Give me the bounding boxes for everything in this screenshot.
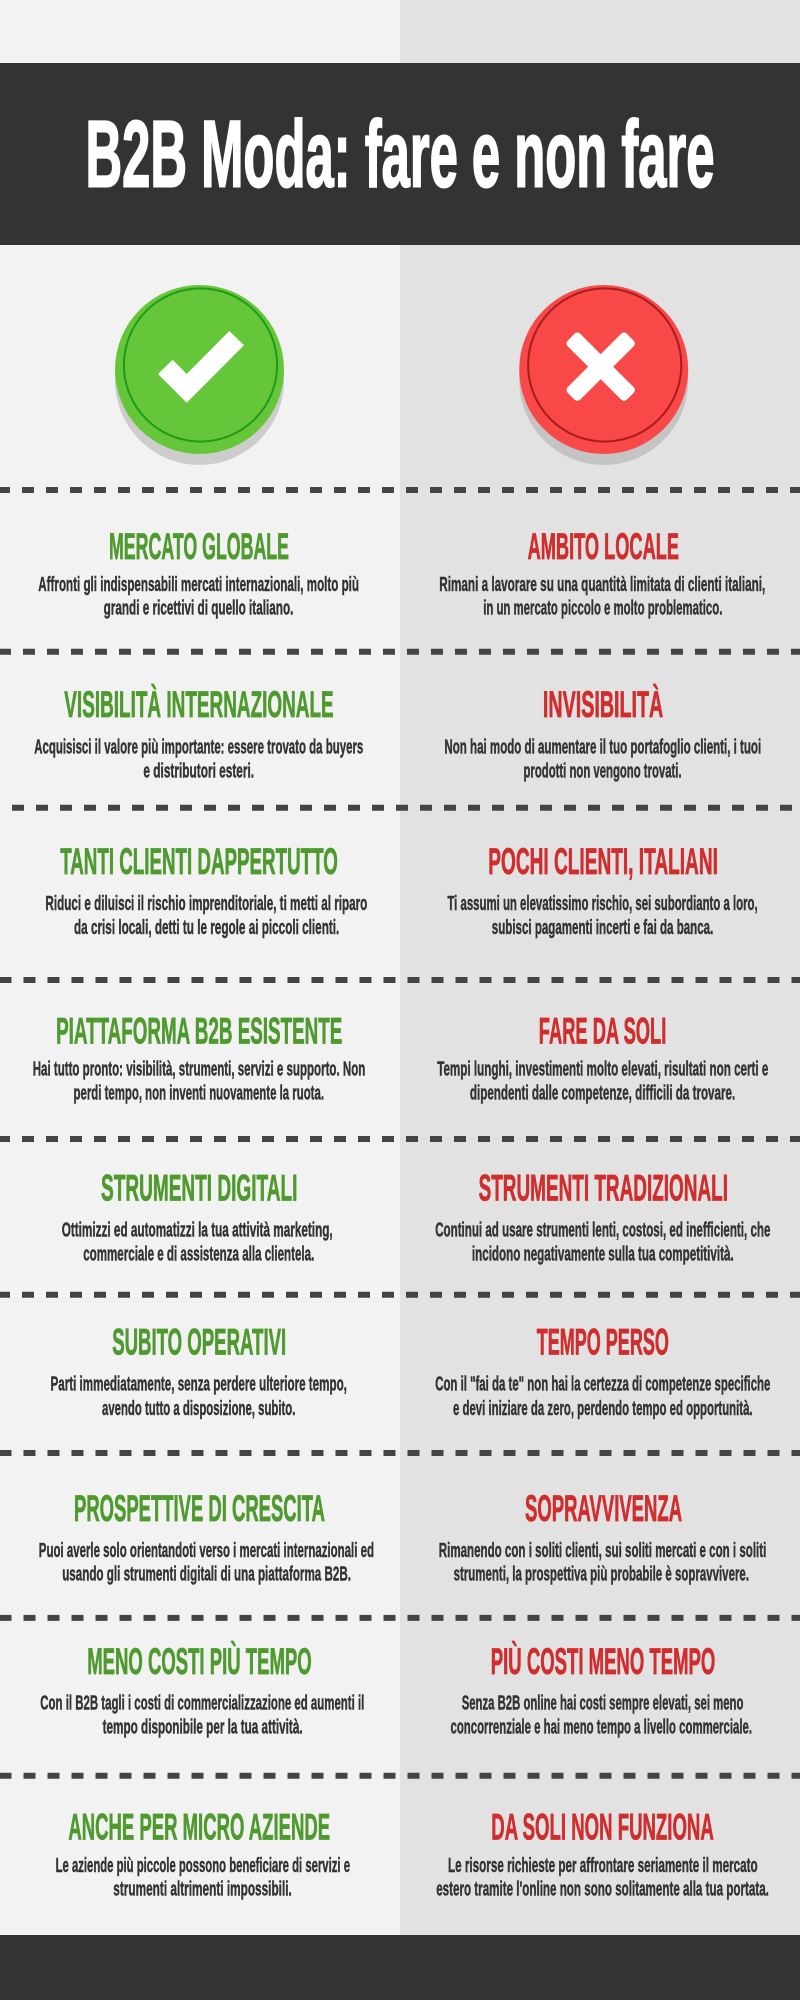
panel: tempo perso	[435, 1321, 770, 1420]
panel: fare da soli: FARE DA SOLI	[539, 1009, 666, 1051]
text block	[62, 1220, 333, 1266]
icon: red cross button	[519, 285, 688, 465]
text block	[38, 574, 359, 620]
text block: commerciale e di assistenza alla clientela.	[83, 1244, 314, 1266]
text block	[439, 574, 765, 620]
text block: perdi tempo, non inventi nuovamente la ruota.	[74, 1082, 324, 1104]
panel: pochi clienti, italiani	[447, 840, 758, 939]
text block	[447, 893, 758, 939]
panel: mercato globale: MERCATO GLOBALE	[109, 525, 289, 567]
text block: Affronti gli indispensabili mercati internazionali, molto più	[38, 574, 359, 596]
text block: Acquisisci il valore più importante: essere trovato da buyers	[34, 736, 363, 758]
text block	[34, 736, 363, 782]
panel: mercato globale	[38, 525, 359, 620]
heading: TANTI CLIENTI DAPPERTUTTO	[60, 840, 338, 882]
text block: da crisi locali, detti tu le regole ai piccoli clienti.	[74, 917, 339, 939]
text block: prodotti non vengono trovati.	[524, 760, 682, 782]
panel: meno costi più tempo: MENO COSTI PIÙ TEMPO	[87, 1640, 312, 1682]
text block	[435, 1374, 770, 1420]
text block: Puoi averle solo orientandoti verso i mercati internazionali ed	[39, 1540, 374, 1562]
text block: strumenti altrimenti impossibili.	[113, 1879, 292, 1901]
panel: sopravvivenza	[439, 1487, 766, 1586]
panel: più costi meno tempo	[450, 1640, 752, 1739]
panel: prospettive di crescita: PROSPETTIVE DI CRESCITA	[74, 1487, 325, 1529]
panel: fare da soli	[437, 1009, 768, 1104]
icon: green check button	[115, 285, 284, 465]
title banner	[0, 63, 800, 245]
text block	[56, 1855, 350, 1901]
heading: INVISIBILITÀ	[543, 683, 663, 725]
panel: tanti clienti dappertutto	[45, 840, 367, 939]
panel: meno costi più tempo	[40, 1640, 364, 1739]
text block: avendo tutto a disposizione, subito.	[102, 1398, 295, 1420]
text block	[33, 1058, 365, 1104]
text block: tempo disponibile per la tua attività.	[103, 1717, 303, 1739]
heading: STRUMENTI DIGITALI	[101, 1167, 297, 1209]
text block	[439, 1540, 766, 1586]
heading: PIATTAFORMA B2B ESISTENTE	[56, 1009, 342, 1051]
footer band	[0, 1935, 800, 2000]
text block	[436, 1855, 769, 1901]
text block: Ottimizzi ed automatizzi la tua attività marketing,	[62, 1220, 333, 1242]
text block: Hai tutto pronto: visibilità, strumenti, servizi e supporto. Non	[33, 1058, 365, 1080]
panel: prospettive di crescita	[39, 1487, 374, 1586]
text block	[40, 1693, 364, 1739]
panel: anche per micro aziende: ANCHE PER MICRO AZIENDE	[68, 1806, 330, 1848]
panel: subito operativi	[50, 1321, 347, 1420]
panel: piattaforma b2b esistente	[33, 1009, 365, 1104]
text block: grandi e ricettivi di quello italiano.	[104, 598, 293, 620]
text block	[444, 736, 761, 782]
text block: usando gli strumenti digitali di una piattaforma B2B.	[62, 1564, 351, 1586]
text block	[437, 1058, 768, 1104]
heading: VISIBILITÀ INTERNAZIONALE	[64, 683, 334, 725]
text block: Le aziende più piccole possono beneficiare di servizi e	[56, 1855, 350, 1877]
text block	[50, 1374, 347, 1420]
panel: ambito locale	[439, 525, 765, 620]
text block: Parti immediatamente, senza perdere ulteriore tempo,	[50, 1374, 347, 1396]
panel: anche per micro aziende	[56, 1806, 350, 1901]
panel: invisibilità	[444, 683, 761, 782]
panel: strumenti digitali	[62, 1167, 333, 1266]
text block	[39, 1540, 374, 1586]
text block	[45, 893, 367, 939]
text block: Riduci e diluisci il rischio imprenditoriale, ti metti al riparo	[45, 893, 367, 915]
text block	[435, 1220, 770, 1266]
text block: Con il B2B tagli i costi di commercializzazione ed aumenti il	[40, 1693, 364, 1715]
panel: strumenti tradizionali	[435, 1167, 770, 1266]
panel: da soli non funziona	[436, 1806, 769, 1901]
panel: subito operativi: SUBITO OPERATIVI	[112, 1321, 286, 1363]
panel: visibilità internazionale	[34, 683, 363, 782]
text block: e distributori esteri.	[143, 760, 254, 782]
text block	[450, 1693, 752, 1739]
